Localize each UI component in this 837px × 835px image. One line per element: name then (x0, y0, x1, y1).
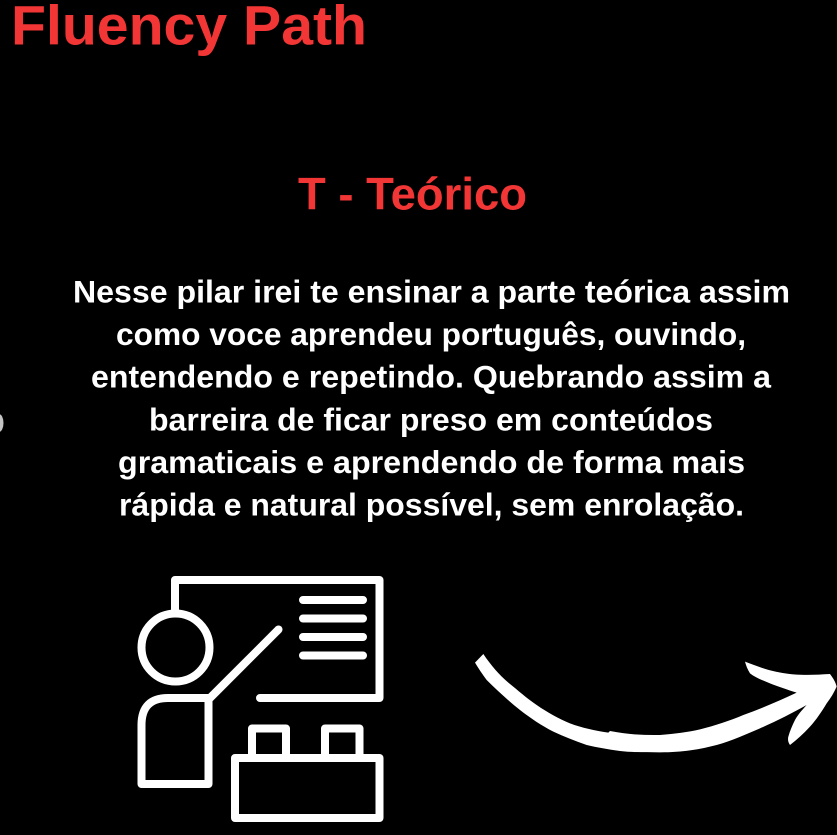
whiteboard outline (175, 580, 380, 698)
body text block: entendendo e repetindo. Quebrando assim a (91, 358, 771, 394)
body text block: como voce aprendeu português, ouvindo, (116, 316, 746, 352)
heading: T - Teórico: T - Teórico (298, 168, 527, 220)
body text block (73, 274, 790, 522)
teacher head (142, 614, 210, 682)
whiteboard text lines (303, 600, 363, 656)
body text block: gramaticais e aprendendo de forma mais (118, 444, 745, 480)
body text block: Nesse pilar irei te ensinar a parte teórica assim (73, 274, 790, 310)
icon: teacher at whiteboard with desk (142, 580, 380, 818)
desk blocks (252, 728, 360, 758)
teacher body (142, 698, 208, 784)
arrow: hand-drawn curved arrow (475, 654, 837, 752)
body text block: barreira de ficar preso em conteúdos (149, 402, 713, 438)
desk (235, 758, 380, 818)
pointer stick (210, 630, 278, 698)
body text block: rápida e natural possível, sem enrolação. (119, 486, 744, 522)
clipped white dot at left edge (0, 414, 4, 432)
